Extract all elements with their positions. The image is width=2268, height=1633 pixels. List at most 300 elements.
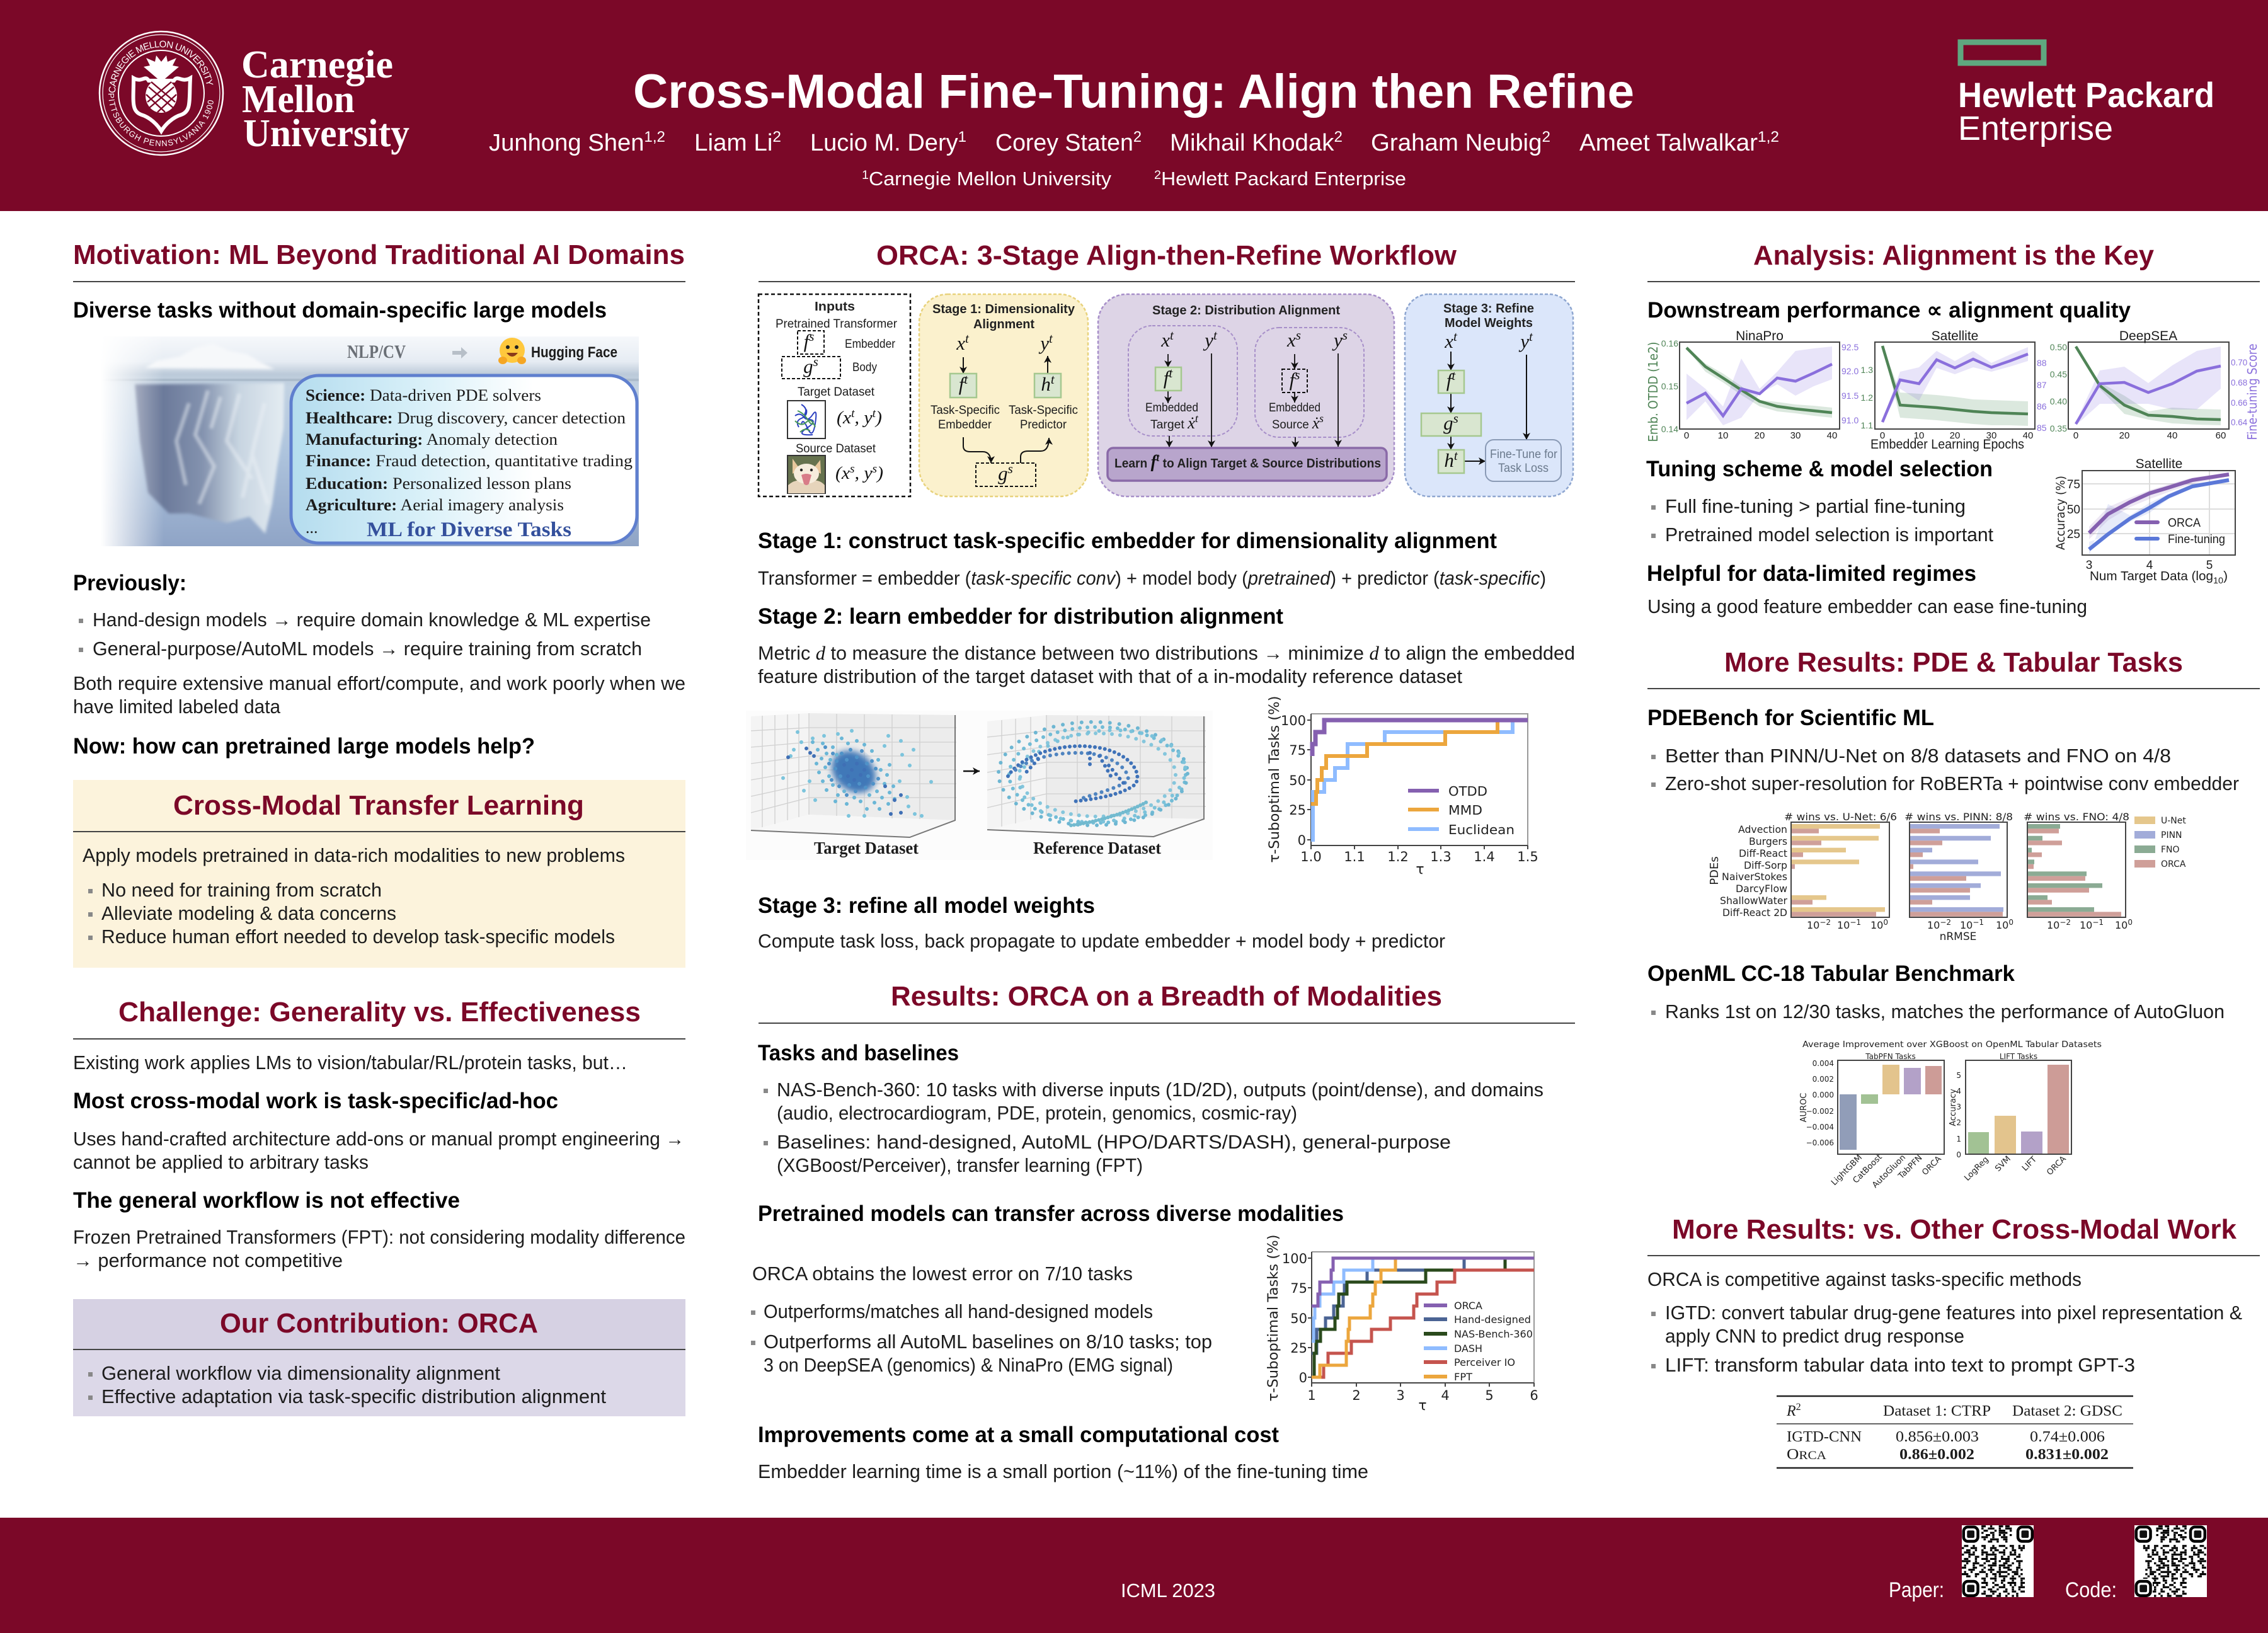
heading: More Results: PDE & Tabular Tasks: [1724, 647, 2183, 678]
affiliations: 2: [1154, 169, 1161, 182]
axis ticks: 10: [2047, 919, 2059, 931]
chart: performance profile: 4: [1441, 1388, 1450, 1403]
heading: Cross-Modal Transfer Learning: [173, 790, 584, 821]
diagram: inputs: (x: [837, 408, 851, 428]
diagram: stage 2: Target ẋ: [1150, 414, 1195, 432]
domain list: [306, 386, 633, 541]
diagram: stage 1: s: [1008, 461, 1013, 476]
legend: FPT: [1454, 1371, 1472, 1383]
domain list: ML for Diverse Tasks: [367, 519, 571, 541]
plot: DeepSEA: 0.68: [2231, 378, 2247, 387]
figure captions: Reference Dataset: [1033, 839, 1161, 857]
legend: [2134, 816, 2186, 869]
table: R2 results: Dataset 2: GDSC: [2012, 1403, 2122, 1419]
chart: distance metric comparison: 50: [1289, 773, 1306, 788]
axis ticks: [1807, 918, 2133, 943]
diagram: inputs: s: [873, 462, 877, 476]
chart: distance metric comparison: 1.5: [1517, 849, 1538, 864]
code link label: Code:: [2065, 1578, 2117, 1602]
diagram: stage 2: s: [1319, 412, 1324, 425]
plot: NinaPro: 30: [1790, 430, 1801, 441]
chart: accuracy vs data: Accuracy (%): [2054, 476, 2068, 550]
diagram: stage 3: f: [1446, 369, 1452, 391]
previously block: [73, 571, 685, 759]
subheading: Diverse tasks without domain-specific large models: [73, 298, 607, 323]
chart: distance metric comparison: 1.4: [1474, 849, 1495, 864]
plot: TabPFN tasks: [1799, 1052, 1944, 1190]
heading: More Results: vs. Other Cross-Modal Work: [1672, 1214, 2237, 1245]
legend: OTDD: [1448, 784, 1487, 799]
heading: Our Contribution: ORCA: [220, 1308, 538, 1339]
chart: distance metric comparison: 75: [1289, 743, 1306, 758]
category labels: Burgers: [1749, 835, 1787, 847]
plot: NinaPro: 0: [1684, 430, 1689, 441]
chart: accuracy vs data: 3: [2086, 559, 2092, 572]
chart: performance profile: [1266, 1235, 1538, 1414]
text: PDEBench: PDEBench for Scientific ML: [1647, 706, 1934, 730]
axis ticks: 10: [1837, 919, 1850, 931]
CMU seal: [98, 30, 224, 156]
text: computational cost: [758, 1423, 1368, 1482]
authors: Lucio M. Dery: [810, 130, 958, 156]
diagram: stage 1: [919, 294, 1088, 496]
previously block: General-purpose/AutoML models → require training from scratch: [93, 638, 642, 660]
chart: performance profile: 6: [1530, 1388, 1538, 1403]
plot: LIFT tasks: ORCA: [2045, 1154, 2068, 1177]
plot: NinaPro: 20: [1755, 430, 1765, 441]
text: stage 3: Stage 3: refine all model weights: [758, 893, 1095, 918]
diagram: inputs: f: [804, 330, 809, 352]
text: stage 1 and 2: [758, 529, 1575, 687]
affiliations: 1: [862, 169, 869, 182]
diagram: stage 2: s: [1343, 328, 1348, 343]
chart: distance metric comparison: 25: [1289, 803, 1306, 818]
domain list: ...: [306, 519, 318, 537]
diagram: inputs: , y: [855, 463, 873, 483]
plot: target dataset: [751, 713, 956, 837]
text: comparison: IGTD: convert tabular drug-gene features into pixel representation &: [1665, 1302, 2242, 1324]
authors: 2: [772, 129, 781, 146]
plot: LIFT tasks: 2: [1956, 1118, 1961, 1127]
diagram: stage 1: Predictor: [1020, 418, 1067, 432]
category labels: Advection: [1738, 823, 1787, 835]
axis ticks: nRMSE: [1940, 931, 1976, 943]
table: R2 results: ORCA: [1787, 1447, 1826, 1463]
authors: 1,2: [644, 129, 665, 146]
chart: OTDD vs fine-tuning: Fine-tuning Score: [2245, 344, 2260, 440]
plot: NinaPro: 91.5: [1841, 391, 1858, 401]
diagram: inputs: g: [803, 355, 813, 377]
diagram: stage 1: Alignment: [973, 318, 1034, 331]
affiliations: Hewlett Packard Enterprise: [1161, 168, 1406, 190]
diagram: stage 2: f: [1290, 369, 1295, 391]
diagram: stage 2: Learn f: [1114, 452, 1157, 472]
text: tasks and baselines: Baselines: hand-designed, AutoML (HPO/DARTS/DASH), general-purpose: [777, 1131, 1451, 1153]
diagram: stage 1: g: [998, 462, 1008, 484]
heading: workflow: ORCA: 3-Stage Align-then-Refine Workflow: [876, 240, 1457, 271]
panel: challenge: Most cross-modal work is task-specific/ad-hoc: [73, 1089, 558, 1113]
diagram: stage 3: Stage 3: Refine: [1443, 302, 1534, 316]
diagram: stage 2: f: [1164, 367, 1169, 389]
figure captions: [814, 839, 1161, 857]
plot: LIFT tasks: 1: [1956, 1135, 1961, 1143]
authors: Liam Li: [694, 130, 771, 156]
text: data-limited: Using a good feature embedder can ease fine-tuning: [1647, 595, 2087, 617]
plot: vs U-Net: [1784, 811, 1897, 917]
iceberg figure: [101, 336, 639, 546]
panel: challenge: → performance not competitive: [73, 1249, 343, 1271]
panel: cross-modal transfer learning: [73, 780, 685, 968]
diagram: stage 1: t: [1049, 331, 1053, 346]
authors: Corey Staten: [995, 130, 1135, 156]
legend: PINN: [2161, 830, 2182, 840]
CMU wordmark: Carnegie: [241, 43, 393, 86]
previously block: Now: how can pretrained large models help?: [73, 734, 535, 759]
plot: TabPFN tasks: −0.006: [1806, 1138, 1834, 1147]
QR code: code: [2134, 1525, 2207, 1597]
diagram: inputs: s: [809, 329, 814, 344]
chart: accuracy vs data: Fine-tuning: [2168, 533, 2225, 546]
text: computational cost: Improvements come at a small computational cost: [758, 1423, 1279, 1447]
header band: [0, 0, 2268, 211]
diagram: inputs: Embedder: [845, 338, 896, 351]
text: computational cost: Embedder learning time is a small portion (~11%) of the fine-tuning time: [758, 1460, 1368, 1482]
plot: NinaPro: 10: [1718, 430, 1728, 441]
text: OpenML: OpenML CC-18 Tabular Benchmark: [1647, 961, 2015, 986]
CMU wordmark: University: [243, 112, 410, 155]
diagram: stage 2: s: [1295, 367, 1300, 382]
chart: distance metric comparison: 100: [1281, 713, 1306, 728]
diagram: stage 2: Source ẋ: [1272, 414, 1319, 432]
diagram: stage 2: to Align Target & Source Distributions: [1159, 457, 1381, 471]
table: R2 results: 2: [1796, 1402, 1801, 1412]
plot: DeepSEA: 0.45: [2050, 369, 2067, 379]
diagram: stage 2: Embedded: [1269, 401, 1320, 415]
chart: distance metric comparison: 1.2: [1387, 849, 1409, 864]
text: tuning scheme: Full fine-tuning > partial fine-tuning: [1665, 495, 1966, 517]
text: stage 3: Compute task loss, back propagate to update embedder + model body + predictor: [758, 930, 1445, 952]
chart: distance metric comparison: 1.1: [1344, 849, 1365, 864]
chart: accuracy vs data: ): [2223, 570, 2228, 583]
legend: Perceiver IO: [1454, 1356, 1515, 1368]
icon: hugging face: [498, 338, 526, 364]
panel: challenge: The general workflow is not effective: [73, 1188, 460, 1213]
text: tuning scheme: Tuning scheme & model selection: [1646, 457, 1993, 481]
diagram: stage 3: [1405, 294, 1573, 496]
axis ticks: −1: [1973, 918, 1984, 927]
diagram: stage 1: t: [1051, 372, 1055, 387]
plot: TabPFN tasks: 0.000: [1813, 1091, 1834, 1099]
chart: tabular bars: [1799, 1040, 2102, 1190]
chart: performance profile: τ-Suboptimal Tasks (%): [1266, 1235, 1281, 1401]
figure: embedding scatter plots: [746, 711, 1213, 860]
plot: Satellite: 20: [1950, 430, 1960, 441]
domain list: Science: Data-driven PDE solvers: [306, 386, 541, 404]
text: pretrained models: Outperforms all AutoML baselines on 8/10 tasks; top: [764, 1331, 1212, 1353]
plot: Satellite: 40: [2023, 430, 2033, 441]
plot: TabPFN tasks: −0.004: [1806, 1123, 1834, 1132]
axis ticks: 10: [1927, 919, 1940, 931]
heading: challenge: Challenge: Generality vs. Effectiveness: [118, 997, 641, 1028]
heading: analysis: Analysis: Alignment is the Key: [1753, 240, 2155, 271]
chart: accuracy vs data: 75: [2067, 478, 2080, 491]
text: stage 1 and 2: Stage 1: construct task-specific embedder for dimensionality alignment: [758, 529, 1497, 553]
legend: NAS-Bench-360: [1454, 1328, 1533, 1340]
chart: accuracy vs data: 10: [2213, 575, 2223, 585]
diagram: stage 1: y: [1040, 332, 1049, 354]
axis ticks: 10: [1870, 919, 1883, 931]
axis ticks: 10: [2115, 919, 2128, 931]
chart: accuracy vs data: Satellite: [2136, 457, 2182, 471]
plot: vs FNO: # wins vs. FNO: 4/8: [2024, 811, 2129, 823]
table: R2 results: IGTD-CNN: [1787, 1429, 1862, 1445]
plot: TabPFN tasks: ORCA: [1920, 1154, 1944, 1177]
diagram: inputs: (x: [835, 463, 850, 483]
table: R2 results: [1777, 1396, 2133, 1468]
plot: LIFT tasks: SVM: [1993, 1154, 2013, 1174]
category labels: Diff-Sorp: [1744, 859, 1787, 871]
panel: PDE and tabular results: [1647, 647, 2260, 1190]
text: PDEBench: [1647, 706, 2239, 794]
axis ticks: −1: [1850, 918, 1861, 927]
text: pretrained models: ORCA obtains the lowest error on 7/10 tasks: [752, 1263, 1133, 1285]
plot: Satellite: 86: [2037, 401, 2047, 411]
plot: vs PINN: [1904, 811, 2013, 917]
diagram: inputs: [759, 294, 910, 496]
plot: TabPFN tasks: AutoGluon: [1870, 1153, 1908, 1190]
chart: accuracy vs data: 5: [2206, 559, 2213, 572]
diagram: stage 2: t: [1195, 412, 1199, 425]
category labels: DarcyFlow: [1736, 883, 1787, 895]
plot: Satellite: 30: [1986, 430, 1996, 441]
diagram: stage 3: Fine-Tune for: [1490, 448, 1558, 461]
chart: accuracy vs data: ORCA: [2168, 517, 2201, 530]
authors: Graham Neubig: [1371, 130, 1540, 156]
plot: DeepSEA: [2050, 329, 2248, 441]
diagram: inputs: , y: [855, 408, 873, 428]
panel: challenge: Uses hand-crafted architecture add-ons or manual prompt engineering →: [73, 1128, 684, 1150]
heading: motivation: Motivation: ML Beyond Traditional AI Domains: [73, 239, 685, 270]
text: data-limited: Helpful for data-limited regimes: [1647, 561, 1976, 586]
plot: TabPFN tasks: LightGBM: [1830, 1153, 1864, 1188]
chart: performance profile: 75: [1290, 1281, 1307, 1296]
text: comparison: [1647, 1268, 2242, 1376]
legend: [1424, 1300, 1533, 1383]
chart: distance metric comparison: τ-Suboptimal Tasks (%): [1267, 696, 1283, 863]
text: pretrained models: Outperforms/matches all hand-designed models: [764, 1300, 1153, 1322]
diagram: inputs: Source Dataset: [796, 442, 876, 456]
panel: our contribution: General workflow via dimensionality alignment: [101, 1362, 500, 1384]
diagram: stage 1: Stage 1: Dimensionality: [932, 302, 1075, 316]
axis ticks: 10: [1960, 919, 1973, 931]
diagram: stage 3: Model Weights: [1445, 316, 1533, 330]
diagram: inputs: Target Dataset: [798, 386, 875, 399]
legend: DASH: [1454, 1343, 1482, 1355]
chart: performance profile: 50: [1290, 1311, 1307, 1326]
plot: DeepSEA: 0.66: [2231, 398, 2247, 408]
chart: PDE bars: [1708, 811, 2186, 943]
HPE logo: [1958, 42, 2214, 147]
table: R2 results: 0.74±0.006: [2030, 1429, 2105, 1445]
icon: protein: [788, 401, 825, 438]
plot: LIFT tasks: LIFT Tasks: [2000, 1052, 2037, 1061]
diagram: stage 3: t: [1454, 448, 1458, 463]
text: stage 1 and 2: Metric d to measure the distance between two distributions → minimize d to align the embedded: [758, 642, 1575, 664]
diagram: stage 2: Embedded: [1145, 401, 1198, 415]
domain list: Manufacturing: Anomaly detection: [306, 430, 558, 449]
axis ticks: −2: [1819, 918, 1831, 927]
panel: results on modalities: [751, 981, 1575, 1482]
diagram: stage 3: t: [1452, 368, 1456, 383]
plot: DeepSEA: 40: [2167, 430, 2177, 441]
text: tuning scheme: Pretrained model selection is important: [1665, 524, 1993, 546]
plot: DeepSEA: 0.35: [2050, 423, 2067, 433]
diagram: stage 1: Task-Specific: [931, 404, 1000, 417]
category labels: Diff-React 2D: [1722, 907, 1787, 919]
panel: other cross-modal work: [1647, 1214, 2260, 1468]
table: R2 results: 0.831±0.002: [2025, 1447, 2109, 1463]
axis ticks: 0: [2128, 918, 2133, 927]
axis ticks: −2: [2059, 918, 2071, 927]
category labels: [1720, 823, 1787, 919]
plot: NinaPro: 92.0: [1841, 366, 1858, 376]
diagram: stage 1: Task-Specific: [1009, 404, 1078, 417]
legend: U-Net: [2161, 816, 2186, 826]
legend: [1408, 784, 1515, 837]
plot: NinaPro: 0.14: [1661, 424, 1678, 434]
plot: TabPFN tasks: TabPFN: [1896, 1154, 1924, 1181]
axis ticks: 0: [2008, 918, 2013, 927]
plot: TabPFN tasks: CatBoost: [1851, 1152, 1884, 1186]
panel: our contribution: Effective adaptation via task-specific distribution alignment: [101, 1385, 606, 1407]
domain list: Healthcare: Drug discovery, cancer detection: [306, 409, 626, 427]
plot: TabPFN tasks: AUROC: [1799, 1093, 1809, 1122]
text: tasks and baselines: NAS-Bench-360: 10 tasks with diverse inputs (1D/2D), outputs (point/dense), and domains: [777, 1079, 1544, 1101]
chart: performance profile: 25: [1290, 1341, 1307, 1356]
icon: dog photo: [788, 456, 825, 493]
legend: MMD: [1448, 803, 1482, 818]
plot: DeepSEA: 20: [2119, 430, 2129, 441]
diagram: stage 2: [1098, 294, 1394, 496]
text: tasks and baselines: (audio, electrocardiogram, PDE, protein, genomics, cosmic-ray): [777, 1102, 1297, 1124]
diagram: stage 3: x: [1445, 330, 1453, 352]
plot: TabPFN tasks: −0.002: [1806, 1107, 1834, 1116]
diagram: inputs: s: [813, 354, 818, 369]
legend: Euclidean: [1448, 822, 1515, 837]
axis ticks: 10: [1807, 919, 1819, 931]
diagram: stage 2: t: [1170, 328, 1174, 343]
text: PDEBench: Zero-shot super-resolution for RoBERTa + pointwise conv embedder: [1665, 772, 2239, 794]
affiliations: [862, 168, 1406, 190]
plot: NinaPro: [1661, 329, 1858, 441]
domain list: Education: Personalized lesson plans: [306, 474, 571, 493]
text: comparison: apply CNN to predict drug response: [1665, 1325, 1964, 1347]
text: OpenML: [1647, 961, 2225, 1023]
plot: LIFT tasks: 4: [1956, 1087, 1961, 1096]
text: tuning scheme: [1646, 457, 1993, 546]
chart: OTDD vs fine-tuning: Emb. OTDD (1e2): [1646, 341, 1661, 442]
panel: our contribution: [73, 1299, 685, 1416]
diagram: stage 2: s: [1296, 328, 1301, 343]
legend: FNO: [2161, 845, 2180, 855]
plot: LIFT tasks: 3: [1956, 1103, 1961, 1111]
category labels: NaiverStokes: [1722, 871, 1787, 883]
authors: 2: [1334, 129, 1343, 146]
plot: LIFT tasks: LIFT: [2020, 1155, 2039, 1173]
diagram: stage 3: Task Loss: [1498, 462, 1549, 475]
diagram: stage 2: t: [1157, 451, 1160, 464]
text: tasks and baselines: Tasks and baselines: [758, 1041, 959, 1065]
diagram: stage 3: s: [1453, 411, 1458, 426]
chart: tabular bars: Average Improvement over XGBoost on OpenML Tabular Datasets: [1802, 1040, 2102, 1050]
footer band: [0, 1518, 2268, 1633]
diagram: stage 1: t: [964, 372, 968, 387]
diagram: inputs: Pretrained Transformer: [776, 318, 898, 331]
plot: NinaPro: 0.15: [1661, 381, 1678, 391]
plot: LIFT tasks: [1949, 1052, 2071, 1183]
panel: motivation: [73, 239, 685, 759]
paper link label: Paper:: [1889, 1578, 1944, 1602]
chart: performance profile: 0: [1299, 1370, 1307, 1385]
plot: NinaPro: NinaPro: [1736, 329, 1784, 343]
diagram: stage 2: Stage 2: Distribution Alignment: [1152, 304, 1340, 318]
HPE logo: Enterprise: [1958, 110, 2113, 147]
authors: Ameet Talwalkar: [1579, 130, 1755, 156]
CMU seal: CARNEGIE MELLON UNIVERSITY: [108, 40, 213, 93]
plot: Satellite: 1.2: [1861, 392, 1873, 403]
diagram: stage 2: x: [1161, 329, 1170, 351]
authors: 2: [1133, 129, 1142, 146]
text: PDEBench: Better than PINN/U-Net on 8/8 datasets and FNO on 4/8: [1665, 745, 2171, 767]
plot: Satellite: 88: [2037, 358, 2047, 368]
authors: 2: [1542, 129, 1550, 146]
plot: NinaPro: 91.0: [1841, 415, 1858, 425]
panel: workflow: [746, 240, 1575, 952]
plot: LIFT tasks: 0: [1956, 1150, 1961, 1159]
legend: Hand-designed: [1454, 1314, 1531, 1326]
plot: NinaPro: 0.16: [1661, 338, 1678, 348]
diagram: stage 3: t: [1453, 329, 1458, 344]
diagram: stage 1: h: [1041, 373, 1051, 395]
plot: Satellite: 1.3: [1861, 365, 1873, 375]
text: tasks and baselines: [758, 1041, 1544, 1176]
CMU wordmark: Mellon: [242, 78, 355, 121]
diagram: inputs: Inputs: [815, 300, 855, 314]
text: stage 3: [758, 893, 1445, 952]
diagram: inputs: Body: [852, 361, 877, 374]
chart: distance metric comparison: 1.0: [1300, 849, 1322, 864]
plot: Satellite: [1861, 329, 2047, 441]
diagram: stage 2: x: [1287, 329, 1296, 351]
legend: ORCA: [2161, 859, 2186, 869]
panel: cross-modal transfer learning: Apply models pretrained in data-rich modalities to new problems: [83, 844, 625, 866]
category labels: Diff-React: [1739, 847, 1787, 859]
axis ticks: 0: [1883, 918, 1888, 927]
chart: accuracy vs data: 25: [2067, 528, 2080, 541]
authors: 1: [958, 129, 966, 146]
chart: accuracy vs data: [2054, 457, 2235, 585]
heading: results: Results: ORCA on a Breadth of Modalities: [891, 981, 1442, 1012]
arrow: [963, 771, 980, 772]
plot: LIFT tasks: LogReg: [1962, 1155, 1991, 1183]
text: stage 1 and 2: feature distribution of the target dataset with that of a in-modality reference dataset: [758, 665, 1462, 687]
diagram: inputs: ): [874, 408, 882, 428]
legend: ORCA: [1454, 1300, 1482, 1312]
text: comparison: LIFT: transform tabular data into text to prompt GPT-3: [1665, 1354, 2135, 1376]
QR code: paper: [1962, 1525, 2034, 1597]
plot: Satellite: 87: [2037, 380, 2047, 390]
panel: analysis: [1646, 240, 2260, 617]
